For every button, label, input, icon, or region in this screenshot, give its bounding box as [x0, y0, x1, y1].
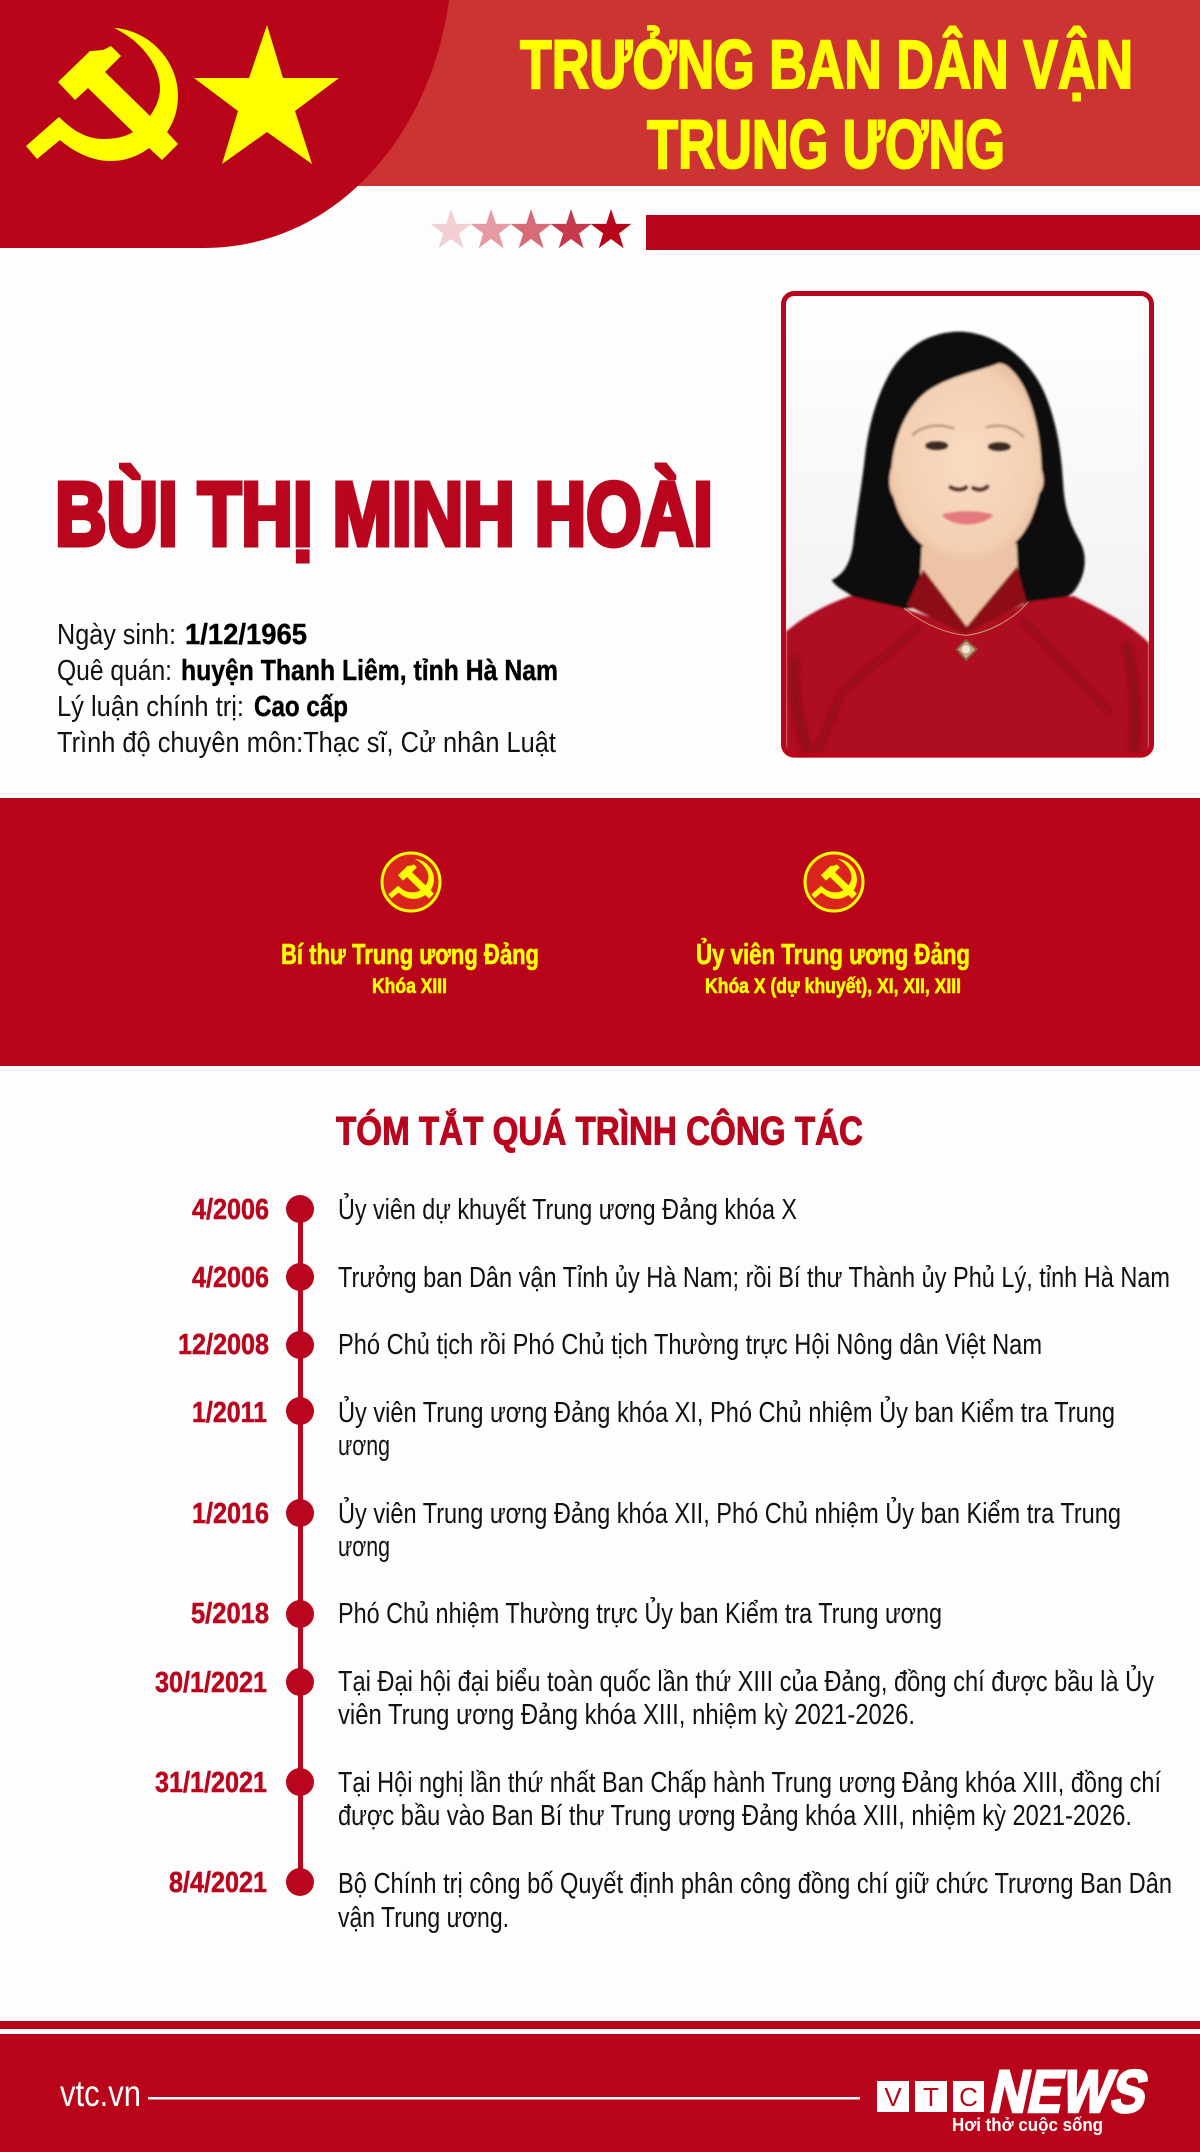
logo: VTC News: NEWS [985, 2058, 1155, 2125]
entry 5/2018 [191, 1596, 942, 1630]
icon: party emblem right [805, 853, 863, 911]
footer [0, 2021, 1200, 2152]
entry 1/2016 [192, 1496, 1121, 1563]
personal details text block [57, 619, 558, 759]
entry 12/2008 [178, 1329, 1042, 1361]
logo: VTC News: C [959, 2082, 978, 2112]
entry 1/2011: ương [338, 1430, 390, 1462]
portrait photo illustration [783, 293, 1152, 755]
personal details text block: Cao cấp [254, 691, 348, 723]
entry 12/2008: 12/2008 [178, 1329, 269, 1361]
portrait frame [783, 293, 1151, 755]
entry 30/1/2021: viên Trung ương Đảng khóa XIII, nhiệm kỳ 2021-2026. [338, 1699, 915, 1731]
face [889, 363, 1044, 565]
section heading: TÓM TẮT QUÁ TRÌNH CÔNG TÁC [336, 1108, 863, 1154]
entry 8/4/2021: 8/4/2021 [169, 1867, 267, 1899]
personal details text block: Quê quán: [57, 655, 172, 687]
entry 31/1/2021 [155, 1767, 1161, 1832]
role: Central Committee member: Khóa X (dự khuyết), XI, XII, XIII [705, 974, 961, 998]
icon: party emblem left [382, 853, 440, 911]
title [520, 26, 1133, 183]
career timeline [155, 1192, 1172, 1934]
personal details text block: Lý luận chính trị: [57, 691, 244, 723]
entry 1/2011: 1/2011 [192, 1397, 267, 1429]
hair [832, 332, 1085, 610]
header light red bar [0, 0, 1200, 186]
entry 5/2018: 5/2018 [191, 1598, 269, 1630]
site url: vtc.vn [60, 2073, 141, 2114]
necklace and pendant [904, 602, 1028, 660]
eyebrows [913, 426, 953, 435]
role: Central Secretary: Bí thư Trung ương Đảng [281, 939, 539, 971]
entry 4/2006 second: 4/2006 [192, 1262, 269, 1294]
icon: large yellow star [194, 25, 339, 164]
dress [786, 596, 1149, 755]
entry 1/2016: 1/2016 [192, 1498, 269, 1530]
timeline axis [298, 1209, 303, 1882]
entry 4/2006 first: Ủy viên dự khuyết Trung ương Đảng khóa X [338, 1192, 797, 1226]
lips [942, 511, 993, 524]
decorative fading stars [431, 209, 631, 248]
name heading: BÙI THỊ MINH HOÀI [55, 464, 713, 565]
header dark red curved panel [0, 0, 449, 248]
entry 4/2006 first: 4/2006 [192, 1194, 269, 1226]
entry 4/2006 first [192, 1192, 797, 1226]
logo: VTC News: V [884, 2082, 902, 2112]
entry 31/1/2021: 31/1/2021 [155, 1767, 267, 1799]
entry 12/2008: Phó Chủ tịch rồi Phó Chủ tịch Thường trực Hội Nông dân Việt Nam [338, 1329, 1042, 1361]
role: Central Committee member: Ủy viên Trung ương Đảng [696, 938, 970, 971]
entry 1/2016: ương [338, 1531, 390, 1563]
entry 30/1/2021: 30/1/2021 [155, 1667, 267, 1699]
neck [920, 543, 1018, 628]
logo: VTC News: Hơi thở cuộc sống [952, 2114, 1103, 2135]
red roles band [0, 798, 1200, 1066]
dress collar [907, 567, 1027, 634]
entry 5/2018: Phó Chủ nhiệm Thường trực Ủy ban Kiểm tra Trung ương [338, 1596, 942, 1630]
dress folds [794, 618, 1135, 753]
personal details text block: Trình độ chuyên môn:Thạc sĩ, Cử nhân Luật [57, 727, 556, 759]
logo: VTC News [877, 2058, 1155, 2135]
role: Central Secretary [281, 939, 539, 998]
entry 30/1/2021 [155, 1664, 1154, 1731]
logo: VTC News: T [923, 2082, 939, 2112]
role: Central Secretary: Khóa XIII [372, 974, 447, 998]
entry 1/2011 [192, 1395, 1115, 1462]
header banner [0, 0, 1200, 248]
personal details text block: huyện Thanh Liêm, tỉnh Hà Nam [181, 655, 558, 687]
icon: hammer and sickle [26, 28, 178, 161]
entry 8/4/2021: vận Trung ương. [338, 1902, 509, 1934]
personal details text block: 1/12/1965 [185, 619, 307, 651]
personal details text block: Ngày sinh: [57, 619, 176, 651]
title: TRUNG ƯƠNG [647, 106, 1005, 183]
eyes [925, 441, 948, 450]
nose [951, 487, 987, 490]
role: Central Committee member [696, 938, 970, 998]
header red stripe [646, 215, 1200, 250]
entry 8/4/2021 [169, 1867, 1172, 1934]
